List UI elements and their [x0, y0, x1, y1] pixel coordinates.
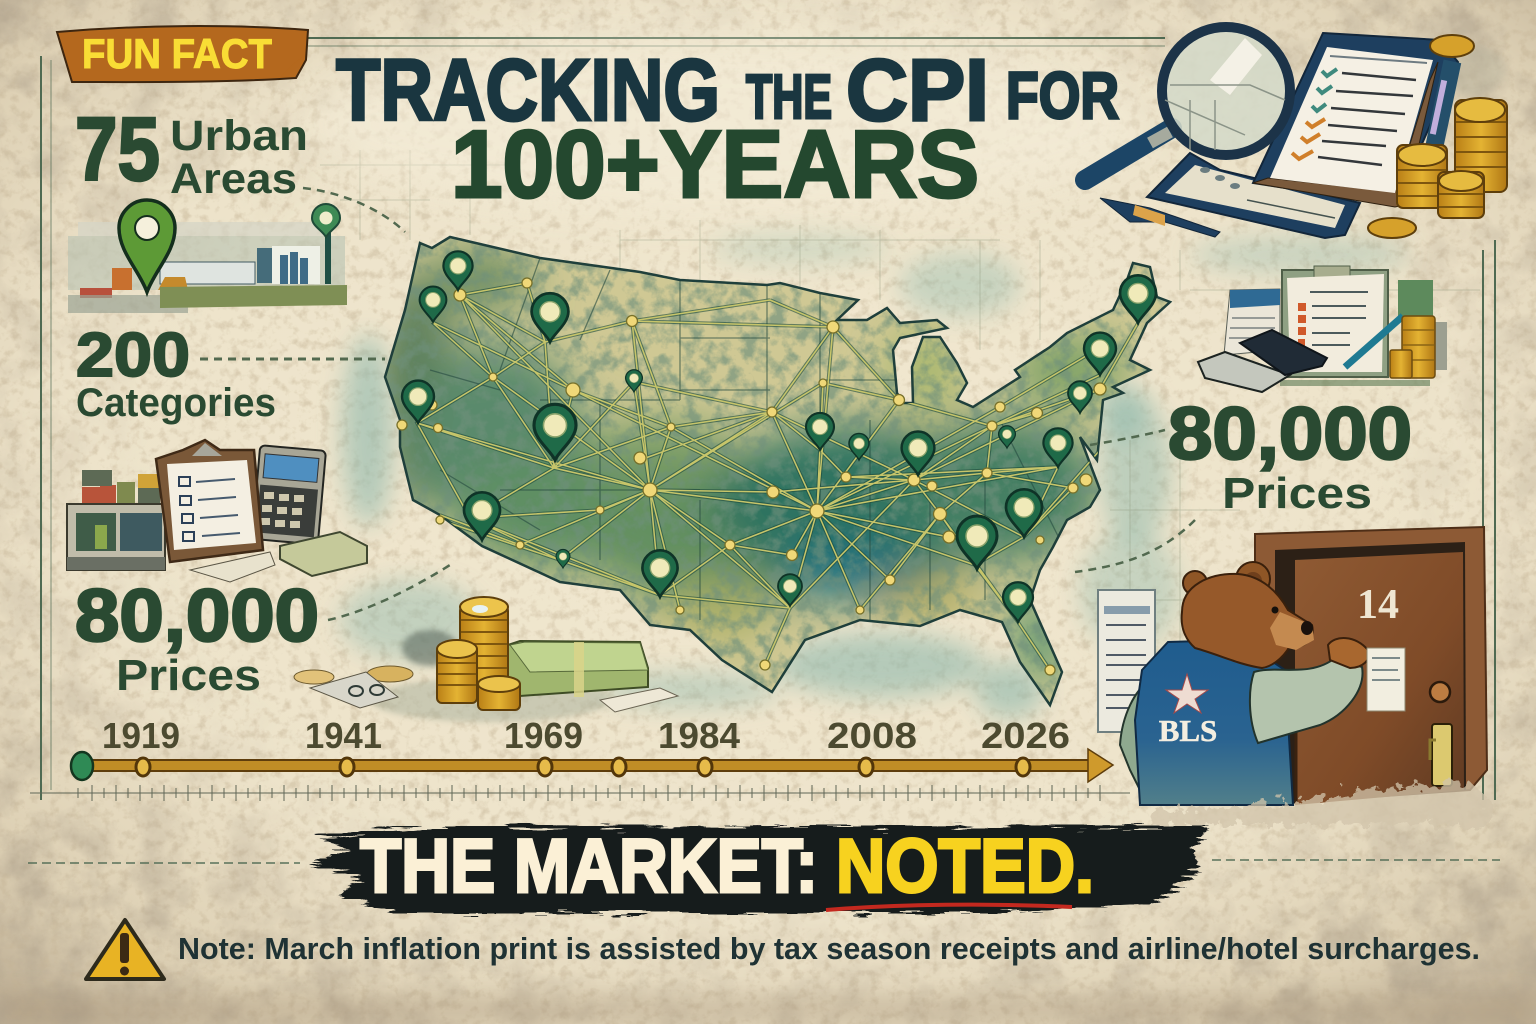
fun fact badge: FUN FACT — [82, 30, 272, 77]
title: TRACKING — [336, 42, 720, 139]
map: United States network — [375, 230, 1180, 710]
map pins — [402, 251, 1156, 622]
stat: 80,000 prices left — [75, 574, 319, 700]
connector: prices left — [328, 565, 450, 620]
posted notice — [1098, 590, 1155, 732]
icon: city scene with pins — [68, 200, 347, 313]
stat: 75 urban areas: Areas — [170, 155, 297, 203]
connector: categories — [200, 358, 385, 360]
stat: 80,000 prices right: Prices — [1222, 469, 1372, 518]
timeline: 1969 — [504, 715, 583, 756]
icon: magnifying glass, clipboard and coins — [1085, 27, 1507, 238]
map nodes — [397, 278, 1106, 675]
door: 14 — [1357, 582, 1399, 628]
title — [310, 35, 1150, 218]
timeline: 2026 — [981, 715, 1070, 756]
connector: urban areas — [303, 188, 405, 232]
title: 100+YEARS — [451, 111, 979, 218]
banner: the market noted: THE MARKET: — [360, 824, 818, 909]
connector: prices right — [1075, 430, 1195, 572]
title: CPI — [846, 42, 989, 139]
stat: 80,000 prices left: 80,000 — [75, 574, 319, 657]
frame lines — [28, 38, 1500, 863]
ground grunge — [1150, 782, 1490, 825]
stat: 75 urban areas: Urban — [170, 112, 308, 160]
bear — [1120, 562, 1405, 805]
bear: BLS — [1159, 713, 1217, 748]
timeline — [30, 715, 1130, 801]
stat: 200 categories: 200 — [76, 321, 190, 390]
timeline: 2008 — [827, 715, 917, 756]
door — [1255, 527, 1487, 805]
stat: 75 urban areas: 75 — [75, 100, 160, 200]
stat: 80,000 prices right: 80,000 — [1168, 392, 1412, 475]
timeline: 1941 — [305, 715, 382, 756]
icon: groceries, clipboard and calculator — [67, 440, 367, 582]
stat: 75 urban areas — [75, 100, 308, 203]
title: FOR — [1006, 58, 1119, 132]
timeline: 1919 — [102, 715, 180, 756]
stat: 80,000 prices right — [1168, 392, 1412, 518]
banner: the market noted: NOTED. — [836, 824, 1094, 909]
faint background map — [320, 150, 1480, 718]
stat: 200 categories — [76, 321, 276, 425]
stat: 200 categories: Categories — [76, 381, 276, 425]
timeline: 1984 — [658, 715, 740, 756]
note text: Note: March inflation print is assisted by tax season receipts and airline/hotel surcharges. — [178, 931, 1480, 966]
icon: warning triangle — [86, 920, 164, 979]
stat: 80,000 prices left: Prices — [116, 651, 261, 700]
icon: coins and cash — [294, 597, 678, 722]
icon: calendar, calculator and report — [1198, 266, 1447, 392]
fun fact badge — [57, 26, 308, 82]
title: THE — [746, 63, 832, 132]
illustration: BLS bear at door — [1098, 527, 1490, 825]
banner: the market noted — [308, 824, 1210, 913]
network lines — [417, 283, 1138, 670]
